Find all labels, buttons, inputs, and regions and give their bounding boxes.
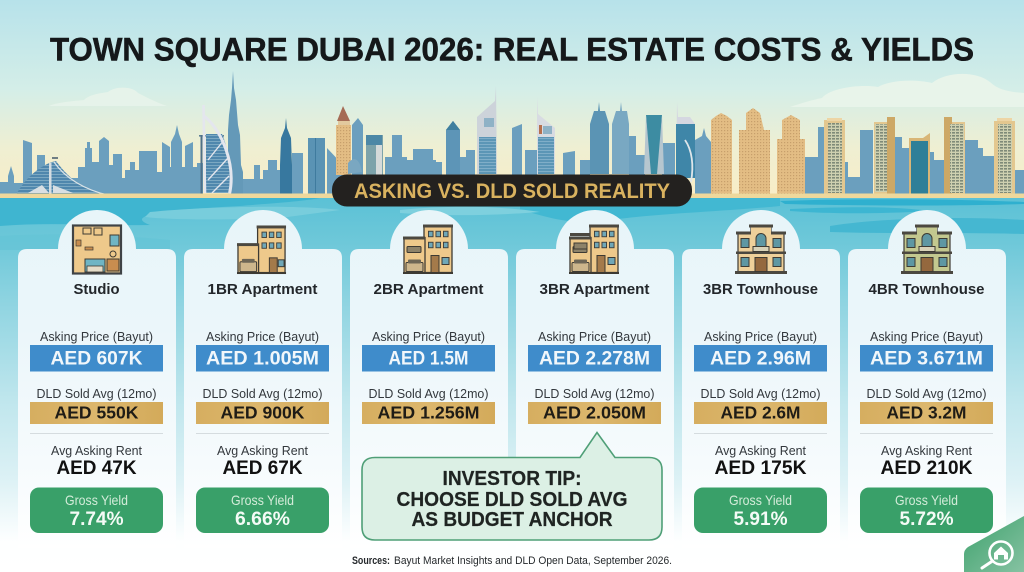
tan tower 1: [711, 113, 732, 195]
card title: Studio: [74, 281, 120, 298]
asking price: [528, 329, 661, 372]
asking price: [860, 329, 993, 372]
card title: 4BR Townhouse: [868, 281, 984, 298]
panel: 2BR apartment: [350, 210, 508, 548]
sources note: Sources:: [352, 555, 390, 567]
pointed tower: [446, 121, 460, 174]
beach: [0, 194, 1024, 198]
gross yield: 5.72%: [900, 508, 954, 530]
dld sold average: DLD Sold Avg (12mo): [202, 386, 322, 401]
gross yield: 6.66%: [235, 508, 290, 530]
cloud right: [790, 74, 1024, 107]
glass tower: [308, 138, 325, 195]
tan tower 3: [777, 115, 805, 195]
dld sold average: [196, 386, 329, 424]
curved blue building: [348, 159, 362, 174]
twin towers: [590, 102, 629, 174]
avg asking rent: Avg Asking Rent: [51, 443, 142, 458]
asking price: AED 2.96M: [710, 348, 811, 370]
asking price: AED 1.005M: [206, 348, 319, 370]
asking price: AED 607K: [50, 348, 143, 370]
avg asking rent: Avg Asking Rent: [881, 443, 972, 458]
asking price: Asking Price (Bayut): [538, 329, 651, 344]
panel: 1BR apartment: [184, 210, 342, 548]
frame tower 4: [994, 118, 1015, 195]
frame tower 3: [944, 117, 965, 195]
asking price: Asking Price (Bayut): [704, 329, 817, 344]
dld sold average: AED 1.256M: [378, 402, 480, 422]
icon: 1BR building: [237, 225, 286, 274]
avg asking rent: Avg Asking Rent: [217, 443, 308, 458]
sources note: Bayut Market Insights and DLD Open Data, September 2026.: [394, 555, 672, 567]
asking price: Asking Price (Bayut): [40, 329, 153, 344]
back silhouette: [0, 118, 1024, 195]
dld sold average: DLD Sold Avg (12mo): [368, 386, 488, 401]
asking price: Asking Price (Bayut): [870, 329, 983, 344]
avg asking rent: AED 47K: [56, 458, 137, 479]
subtitle pill: ASKING VS. DLD SOLD REALITY: [354, 180, 670, 203]
jumeirah hotel: [16, 158, 108, 195]
panel: 3BR townhouse: [682, 210, 840, 548]
two tone block: [366, 135, 383, 176]
dld sold average: [30, 386, 163, 424]
gross yield: Gross Yield: [231, 492, 294, 508]
gross yield: Gross Yield: [729, 492, 792, 508]
skyline: [0, 71, 1024, 195]
tan tower: [336, 106, 351, 175]
card title: 3BR Townhouse: [703, 281, 818, 298]
avg asking rent: AED 175K: [714, 458, 807, 479]
asking price: [196, 329, 329, 372]
background sky: [0, 0, 1024, 198]
sail tower: [676, 102, 695, 182]
emirates tower one: [477, 86, 497, 174]
dld sold average: [860, 386, 993, 424]
avg asking rent: [880, 443, 973, 479]
dld sold average: [694, 386, 827, 424]
dld sold average: DLD Sold Avg (12mo): [534, 386, 654, 401]
burj al arab: [199, 105, 231, 195]
gross yield: Gross Yield: [895, 492, 958, 508]
frame tower 2: [874, 117, 895, 195]
icon: 3BR building: [569, 224, 619, 274]
dld sold average: [528, 386, 661, 424]
frame tower 1: [824, 118, 845, 195]
asking price: [694, 329, 827, 372]
gross yield: 7.74%: [70, 508, 124, 530]
corner logo: [964, 516, 1024, 572]
avg asking rent: AED 210K: [880, 458, 973, 479]
icon: studio floor plan: [73, 226, 121, 274]
card title: 2BR Apartment: [374, 281, 484, 298]
cloud left: [49, 88, 167, 106]
asking price: AED 2.278M: [539, 348, 650, 370]
asking price: [30, 329, 163, 372]
dld sold average: DLD Sold Avg (12mo): [866, 386, 986, 401]
panel: studio: [18, 210, 176, 548]
gross yield: 5.91%: [734, 508, 788, 530]
asking price: Asking Price (Bayut): [372, 329, 485, 344]
dld sold average: DLD Sold Avg (12mo): [700, 386, 820, 401]
avg asking rent: [217, 443, 308, 479]
avg asking rent: Avg Asking Rent: [715, 443, 806, 458]
burj khalifa: [228, 71, 243, 195]
callout: investor tip: INVESTOR TIP:: [442, 467, 582, 490]
dld sold average: DLD Sold Avg (12mo): [36, 386, 156, 401]
callout: investor tip: AS BUDGET ANCHOR: [412, 508, 613, 531]
dld sold average: AED 3.2M: [886, 402, 966, 422]
teal tower: [909, 133, 930, 195]
dld sold average: AED 2.050M: [543, 402, 646, 422]
tan tower 2: [739, 108, 770, 195]
icon: 3BR townhouse: [735, 224, 787, 274]
panel: 3BR apartment: [516, 210, 674, 548]
asking price: AED 3.671M: [870, 348, 983, 370]
asking price: Asking Price (Bayut): [206, 329, 319, 344]
dld sold average: AED 900K: [220, 402, 305, 422]
avg asking rent: [714, 443, 807, 479]
title: TOWN SQUARE DUBAI 2026: REAL ESTATE COSTS & YIELDS: [50, 32, 974, 68]
card title: 3BR Apartment: [540, 281, 650, 298]
asking price: AED 1.5M: [388, 348, 468, 370]
background water: [0, 198, 1024, 572]
gross yield: [196, 488, 329, 533]
dark blue tower: [280, 118, 292, 195]
dld sold average: AED 2.6M: [720, 402, 800, 422]
gross yield: [694, 488, 827, 533]
gross yield: Gross Yield: [65, 492, 128, 508]
callout: investor tip: [362, 432, 662, 540]
panel: 4BR townhouse: [848, 210, 1006, 548]
icon: 4BR townhouse: [901, 224, 953, 274]
twisted tower: [644, 115, 664, 174]
dld sold average: AED 550K: [54, 402, 139, 422]
avg asking rent: AED 67K: [222, 458, 303, 479]
subtitle pill: [332, 174, 692, 206]
emirates tower two: [537, 97, 555, 174]
callout: investor tip: CHOOSE DLD SOLD AVG: [396, 488, 628, 511]
asking price: [362, 329, 495, 372]
gross yield: [30, 488, 163, 533]
card title: 1BR Apartment: [208, 281, 318, 298]
avg asking rent: [51, 443, 142, 479]
icon: 2BR building: [403, 224, 453, 274]
gross yield: [860, 488, 993, 533]
dld sold average: [362, 386, 495, 424]
